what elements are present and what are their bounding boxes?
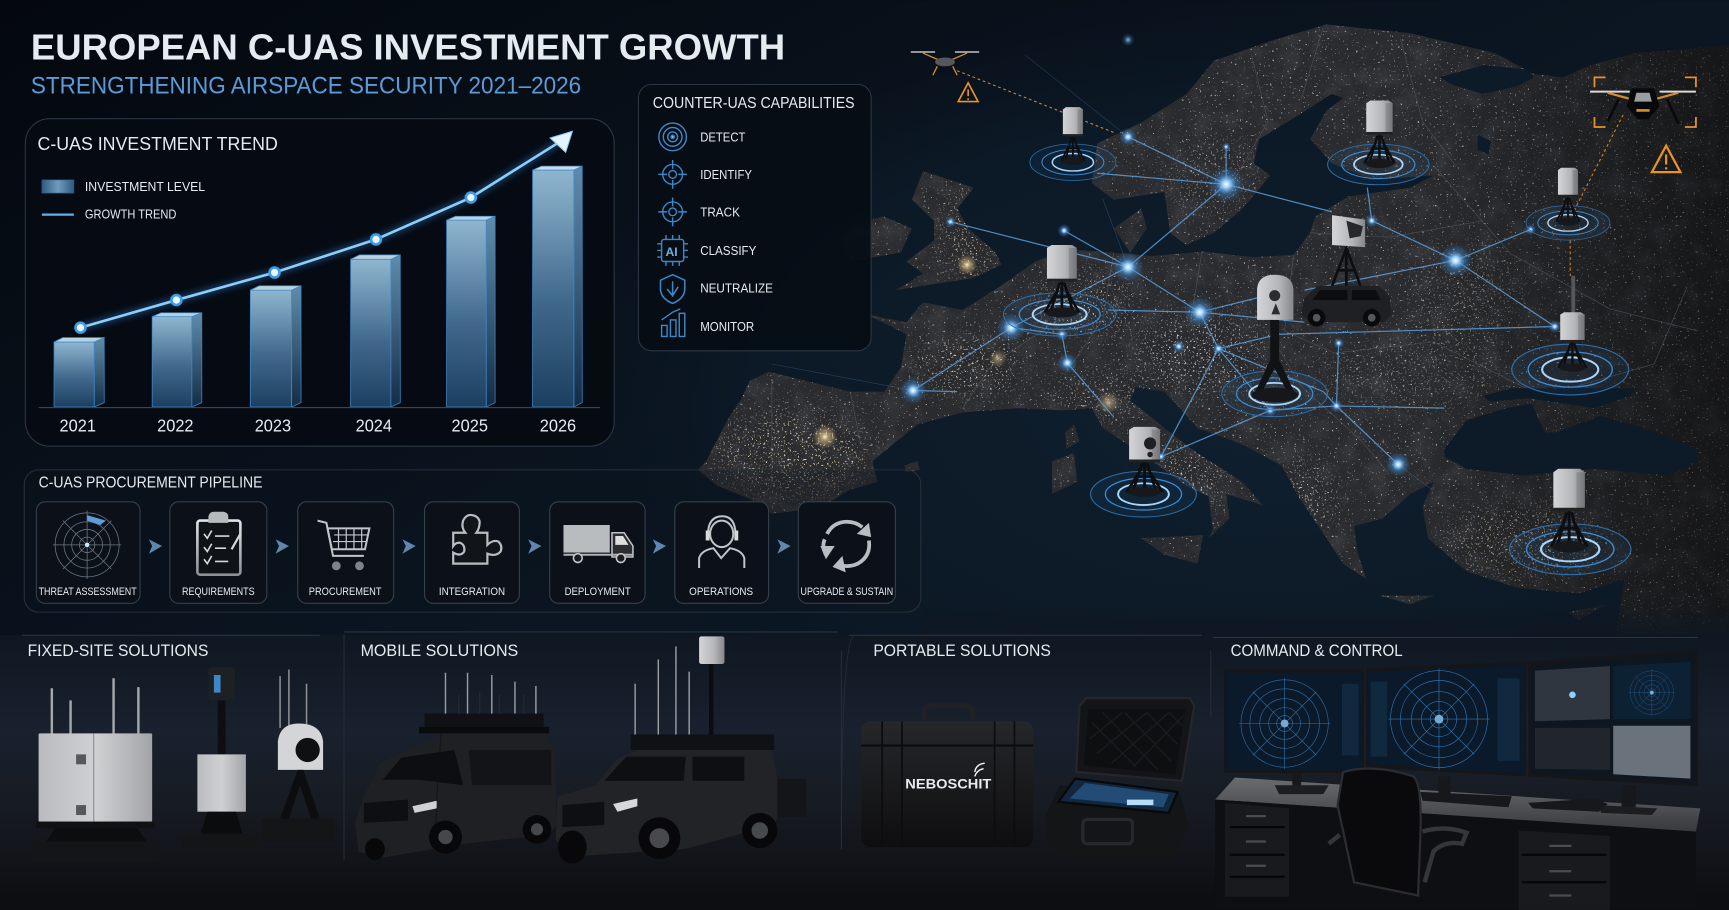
title: EUROPEAN C-UAS INVESTMENT GROWTH [31, 27, 785, 68]
step: requirements: REQUIREMENTS [182, 586, 255, 598]
arrow [528, 539, 541, 554]
threat drone west [911, 52, 979, 75]
legend [42, 179, 205, 221]
arrow [276, 539, 289, 554]
sensor tower: Finland [1328, 100, 1429, 185]
capability: classify [657, 235, 757, 266]
step: requirements [170, 502, 267, 603]
network nodes [900, 33, 1561, 477]
threat tracks [957, 71, 1623, 276]
bottom equipment band [0, 601, 1729, 910]
desk [1215, 778, 1700, 910]
chart heading: C-UAS INVESTMENT TREND [37, 133, 278, 154]
year labels: 2025 [452, 415, 488, 435]
capability: neutralize: NEUTRALIZE [700, 280, 773, 295]
step: threat assessment [36, 502, 140, 603]
year labels: 2021 [60, 415, 96, 435]
step: integration: INTEGRATION [439, 586, 505, 598]
case logo [905, 763, 992, 792]
right monitor [1528, 650, 1698, 786]
bar chart [39, 166, 600, 408]
panel: portable solutions [861, 641, 1194, 857]
capability: track [658, 198, 740, 226]
tracked drone east [1590, 77, 1696, 127]
capability: classify: AI [665, 245, 678, 259]
sensor tower: France and Benelux [1003, 245, 1116, 336]
legend: INVESTMENT LEVEL [85, 179, 205, 194]
capability: identify: IDENTIFY [700, 167, 752, 182]
sea [529, 0, 1729, 662]
capability: neutralize [661, 275, 773, 303]
capability: detect [659, 123, 745, 151]
arrow [149, 539, 162, 554]
capability: monitor: MONITOR [700, 319, 754, 334]
warning icon west [958, 83, 978, 102]
year labels: 2024 [356, 415, 392, 435]
year labels: 2022 [157, 415, 194, 435]
year labels: 2023 [255, 415, 291, 435]
panel: investment trend chart [25, 119, 614, 446]
step: threat assessment: THREAT ASSESSMENT [39, 586, 137, 598]
step: deployment: DEPLOYMENT [565, 586, 631, 598]
network links [772, 55, 1555, 491]
arrow [653, 539, 666, 554]
map of Europe [698, 24, 1729, 634]
step: procurement: PROCUREMENT [309, 586, 382, 598]
sensor tower: central Europe [1222, 275, 1328, 417]
subtitle: STRENGTHENING AIRSPACE SECURITY 2021–2026 [31, 72, 581, 99]
growth trend line [76, 131, 572, 333]
case logo: NEBOSCHIT [905, 777, 992, 792]
step: operations [675, 502, 769, 603]
heading: PORTABLE SOLUTIONS [873, 641, 1051, 660]
sensor tower: Baltic east [1526, 168, 1610, 240]
mast unit [183, 667, 258, 850]
pipeline heading: C-UAS PROCUREMENT PIPELINE [39, 475, 262, 492]
heading: MOBILE SOLUTIONS [361, 641, 518, 660]
step: operations: OPERATIONS [689, 586, 753, 598]
sensor tower: Turkey [1510, 469, 1631, 575]
vehicle-mounted sensor [1301, 215, 1392, 327]
sensor tower: Norway [1030, 107, 1116, 180]
pickup with mast [556, 636, 806, 864]
panel: procurement pipeline [24, 470, 921, 612]
capability: monitor [662, 309, 754, 336]
step: integration [425, 502, 519, 603]
step: deployment [550, 502, 645, 603]
capability: classify: CLASSIFY [700, 243, 757, 258]
landmass [698, 24, 1729, 634]
arrow [777, 539, 791, 554]
van with sensor rack [355, 673, 557, 860]
panel: fixed-site solutions [28, 641, 334, 861]
step: procurement [298, 502, 394, 603]
capabilities heading: COUNTER-UAS CAPABILITIES [653, 95, 855, 112]
panel: mobile solutions [355, 636, 806, 864]
year labels: 2026 [540, 415, 576, 435]
panel: command and control [1215, 641, 1700, 910]
capability: track: TRACK [700, 204, 740, 219]
three monitors [1224, 650, 1698, 815]
sensor tower: Ukraine [1512, 276, 1629, 395]
office chair [1329, 768, 1467, 896]
open case with tablet [1045, 698, 1194, 857]
capability: detect: DETECT [700, 129, 745, 144]
step: upgrade and sustain: UPGRADE & SUSTAIN [801, 586, 893, 598]
arrow [402, 539, 416, 554]
legend: GROWTH TREND [85, 207, 176, 221]
step: upgrade and sustain [798, 502, 895, 603]
center monitor [1366, 662, 1526, 776]
Black Sea, Azov, White Sea and lakes [1439, 65, 1697, 475]
capability: identify [658, 160, 752, 189]
heading: COMMAND & CONTROL [1231, 641, 1403, 660]
heading: FIXED-SITE SOLUTIONS [28, 641, 208, 660]
year labels [60, 415, 576, 435]
warning icon east [1652, 146, 1680, 172]
sensor tower: Italy [1091, 427, 1196, 517]
tripod camera unit [261, 669, 334, 841]
large cabinet unit [32, 678, 160, 861]
panel: counter-UAS capabilities [638, 84, 871, 351]
closed hard case [861, 706, 1033, 847]
left monitor [1224, 669, 1364, 773]
